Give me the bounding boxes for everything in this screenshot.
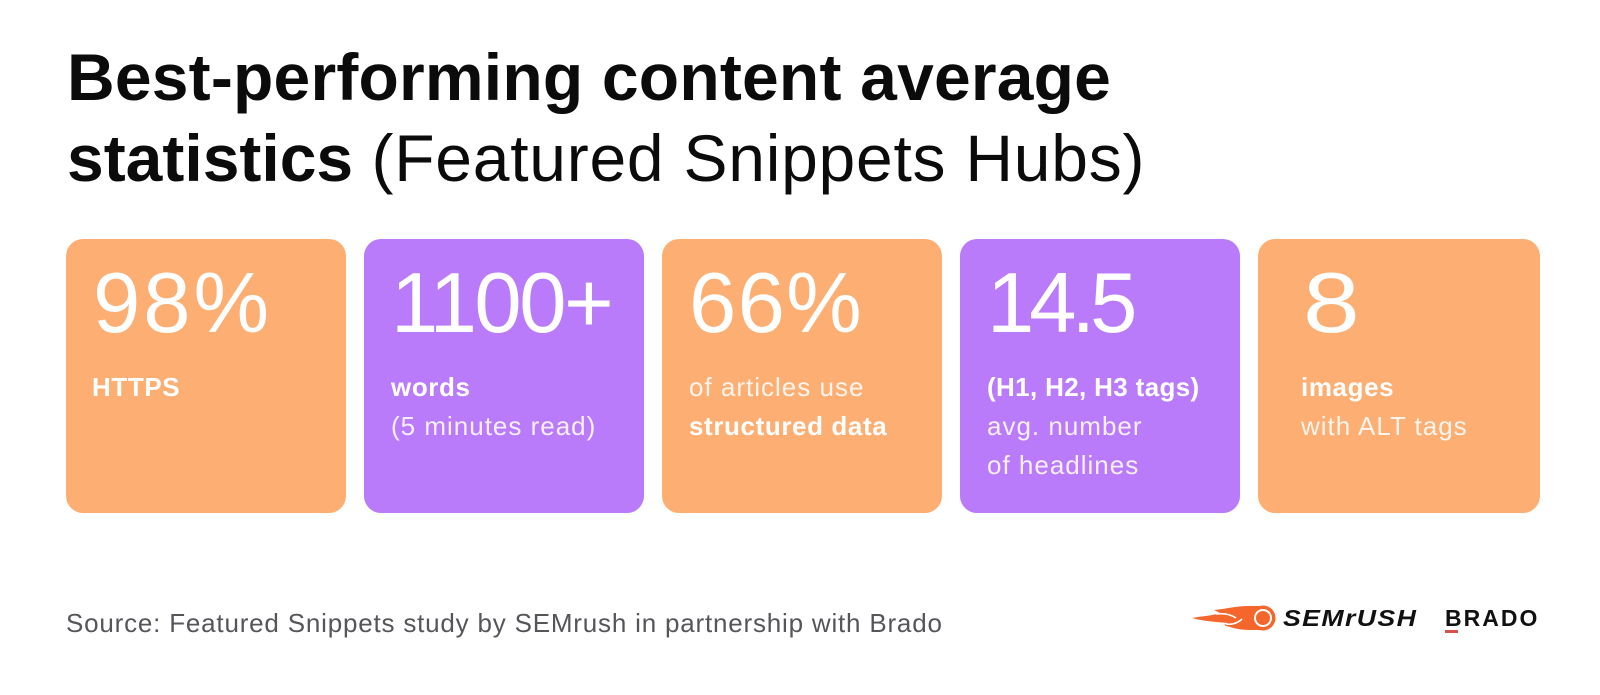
card: 66% structured data: structured data bbox=[689, 411, 887, 441]
card: 66% structured data: 66% bbox=[689, 256, 863, 351]
card: 98% HTTPS: 98% bbox=[93, 256, 272, 351]
card: 8 images: with ALT tags bbox=[1301, 411, 1468, 441]
source note: Source: Featured Snippets study by SEMrush in partnership with Brado bbox=[66, 608, 943, 638]
card: 1100+ words: words bbox=[391, 372, 471, 402]
title: statistics (Featured Snippets Hubs) bbox=[67, 121, 1145, 195]
card: 14.5 headlines: of headlines bbox=[987, 450, 1139, 480]
card: 66% structured data: of articles use bbox=[689, 372, 864, 402]
card: 14.5 headlines: 14.5 bbox=[987, 256, 1132, 351]
card: 8 images: images bbox=[1301, 372, 1394, 402]
card: 98% HTTPS bbox=[66, 239, 346, 513]
semrush wordmark: SEMrUSH bbox=[1283, 605, 1417, 631]
card: 66% structured data bbox=[662, 239, 942, 513]
card: 14.5 headlines: (H1, H2, H3 tags) bbox=[987, 372, 1200, 402]
brado red dots bbox=[1445, 630, 1458, 633]
card: 14.5 headlines: avg. number bbox=[987, 411, 1143, 441]
card: 14.5 headlines bbox=[960, 239, 1240, 513]
card: 1100+ words: 1100+ bbox=[391, 256, 611, 351]
icon: semrush flame logo bbox=[1192, 606, 1276, 630]
title bbox=[67, 40, 1145, 195]
title: Best-performing content average bbox=[67, 40, 1111, 114]
card: 1100+ words bbox=[364, 239, 644, 513]
card: 1100+ words: (5 minutes read) bbox=[391, 411, 596, 441]
brado wordmark: BRADO bbox=[1445, 605, 1539, 631]
card: 98% HTTPS: HTTPS bbox=[92, 372, 180, 402]
card: 8 images bbox=[1258, 239, 1540, 513]
card: 8 images: 8 bbox=[1303, 256, 1360, 351]
